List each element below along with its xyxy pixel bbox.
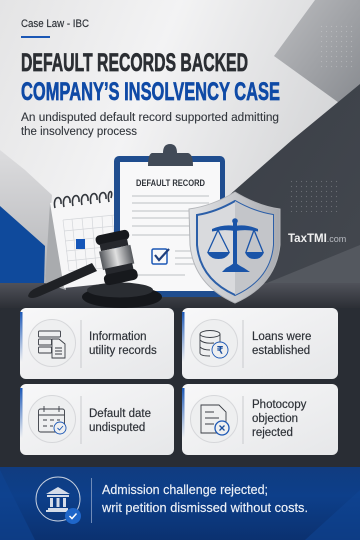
- card: photocopy objection rejected: [182, 384, 338, 455]
- accent rule: [21, 36, 50, 38]
- record heading: DEFAULT RECORD: [136, 178, 205, 189]
- illustration: gavel: [28, 229, 162, 308]
- subtitle: the insolvency process: [21, 124, 137, 138]
- label: rejected: [252, 427, 293, 439]
- label: [252, 399, 307, 439]
- checkbox: [152, 249, 169, 264]
- illustration: calendar: [45, 192, 122, 290]
- label: utility records: [89, 345, 157, 357]
- conclusion text: Admission challenge rejected;: [102, 482, 268, 497]
- title: [21, 49, 280, 106]
- label: [89, 408, 151, 434]
- calendar spiral binding: [54, 192, 112, 208]
- card: loans established: [182, 308, 338, 379]
- footer banner: [0, 467, 360, 540]
- label: Default date: [89, 408, 151, 420]
- label: Loans were: [252, 331, 311, 343]
- label: [89, 331, 157, 357]
- brand: TaxTMI.com: TaxTMI.com: [288, 233, 346, 245]
- icon: records and document: [28, 320, 76, 366]
- card: default date undisputed: [20, 384, 174, 455]
- label: undisputed: [89, 422, 145, 434]
- label: objection: [252, 413, 298, 425]
- record lines: [132, 196, 209, 275]
- icon: calendar check: [28, 396, 76, 442]
- label: [252, 331, 311, 357]
- illustration: clipboard: [114, 144, 225, 297]
- scales of justice: [207, 218, 264, 272]
- label: Photocopy: [252, 399, 307, 411]
- subtitle: [21, 110, 279, 138]
- kicker: Case Law - IBC: Case Law - IBC: [21, 18, 89, 30]
- icon: document rejected: [190, 396, 238, 442]
- clipboard clip: [148, 144, 193, 166]
- card: loans established: ₹: [217, 346, 224, 356]
- subtitle: An undisputed default record supported admitting: [21, 110, 279, 124]
- label: established: [252, 345, 310, 357]
- calendar highlighted date: [76, 239, 85, 249]
- card: information utility records: [20, 308, 174, 379]
- conclusion text: [101, 482, 308, 515]
- icon: coins with rupee: [190, 320, 238, 366]
- icon: courthouse with check badge: [36, 477, 81, 524]
- illustration: shield with scales: [189, 192, 280, 303]
- label: Information: [89, 331, 147, 343]
- conclusion text: writ petition dismissed without costs.: [101, 500, 308, 515]
